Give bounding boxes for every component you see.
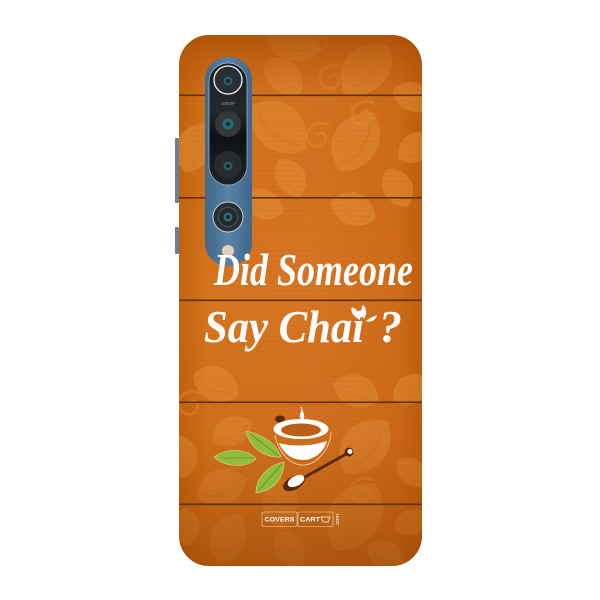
saucer blob <box>275 416 285 422</box>
heading: Did Someone: Did Someone <box>213 245 413 295</box>
logo: CoversCart: COVERS <box>264 518 294 524</box>
logo: CoversCart: .com <box>335 514 341 526</box>
lens 3 <box>214 151 242 179</box>
camera module <box>205 57 252 266</box>
panel: phone case back <box>179 35 422 566</box>
steam <box>298 407 304 423</box>
lens 4 <box>213 202 243 232</box>
chai surface <box>281 424 321 436</box>
lens 1 <box>214 66 242 94</box>
icon: tea leaves <box>214 431 284 493</box>
plank lines <box>179 94 422 505</box>
camera island <box>209 63 247 185</box>
logo: CoversCart: CART <box>300 518 320 524</box>
flash <box>222 245 234 257</box>
icon: chai cup <box>274 407 331 465</box>
decorative leaf pattern <box>179 37 422 566</box>
icon: spoon <box>280 448 354 494</box>
heading: Say Chai ?: ? <box>379 301 402 352</box>
icon: side buttons <box>175 138 179 254</box>
logo: CoversCart <box>262 512 341 526</box>
icon: small leaves over the i <box>351 305 377 322</box>
camera label: 108MP <box>221 101 235 106</box>
cup bowl <box>279 441 327 460</box>
lens 2 <box>215 111 241 137</box>
heading: Say Chai ?: Say Chai <box>204 301 364 352</box>
cup rim <box>274 419 328 439</box>
cup outline <box>275 432 331 465</box>
